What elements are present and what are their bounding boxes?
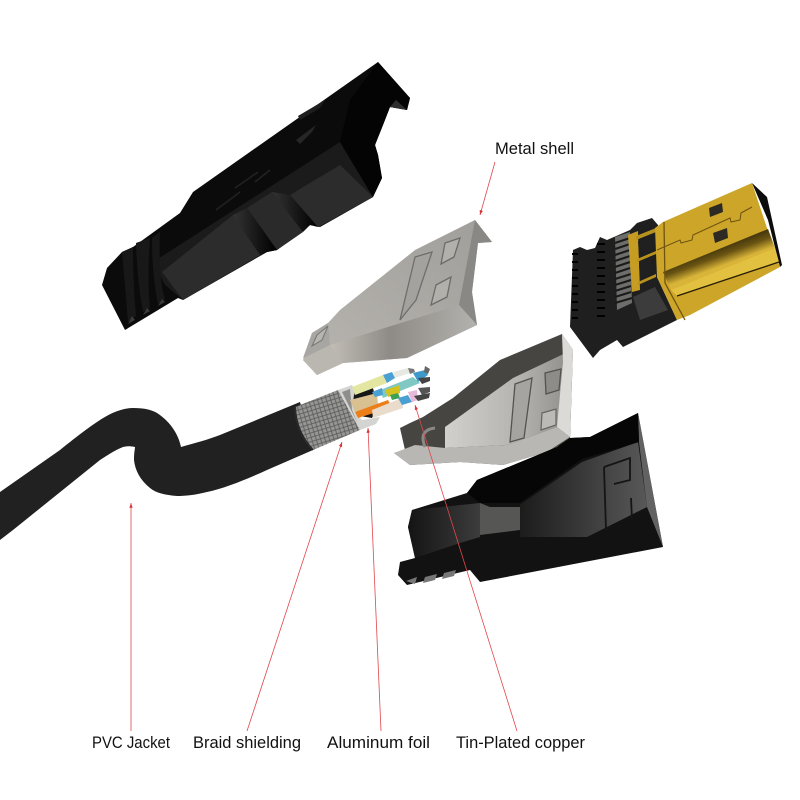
label: Metal shell: Metal shell bbox=[495, 139, 574, 158]
black PVC jacket cable bbox=[0, 402, 313, 540]
label: Aluminum foil bbox=[327, 428, 430, 752]
braid shielding bbox=[295, 390, 360, 450]
aluminum foil bbox=[338, 385, 380, 430]
upper metal shell bbox=[303, 220, 492, 375]
label: Aluminum foil: Aluminum foil bbox=[327, 733, 430, 752]
top black housing bbox=[102, 62, 410, 330]
tin-plated conductors bbox=[350, 366, 430, 418]
lower black housing bbox=[398, 413, 663, 585]
label: Tin-Plated copper: Tin-Plated copper bbox=[456, 733, 585, 752]
label: Metal shell bbox=[480, 139, 574, 215]
label: Braid shielding bbox=[193, 442, 342, 752]
label: Braid shielding: Braid shielding bbox=[193, 733, 301, 752]
label: Tin-Plated copper bbox=[415, 405, 585, 752]
gold HDMI connector bbox=[570, 183, 782, 358]
lower metal shell bbox=[394, 334, 573, 465]
label: PVC Jacket: PVC Jacket bbox=[92, 733, 170, 752]
